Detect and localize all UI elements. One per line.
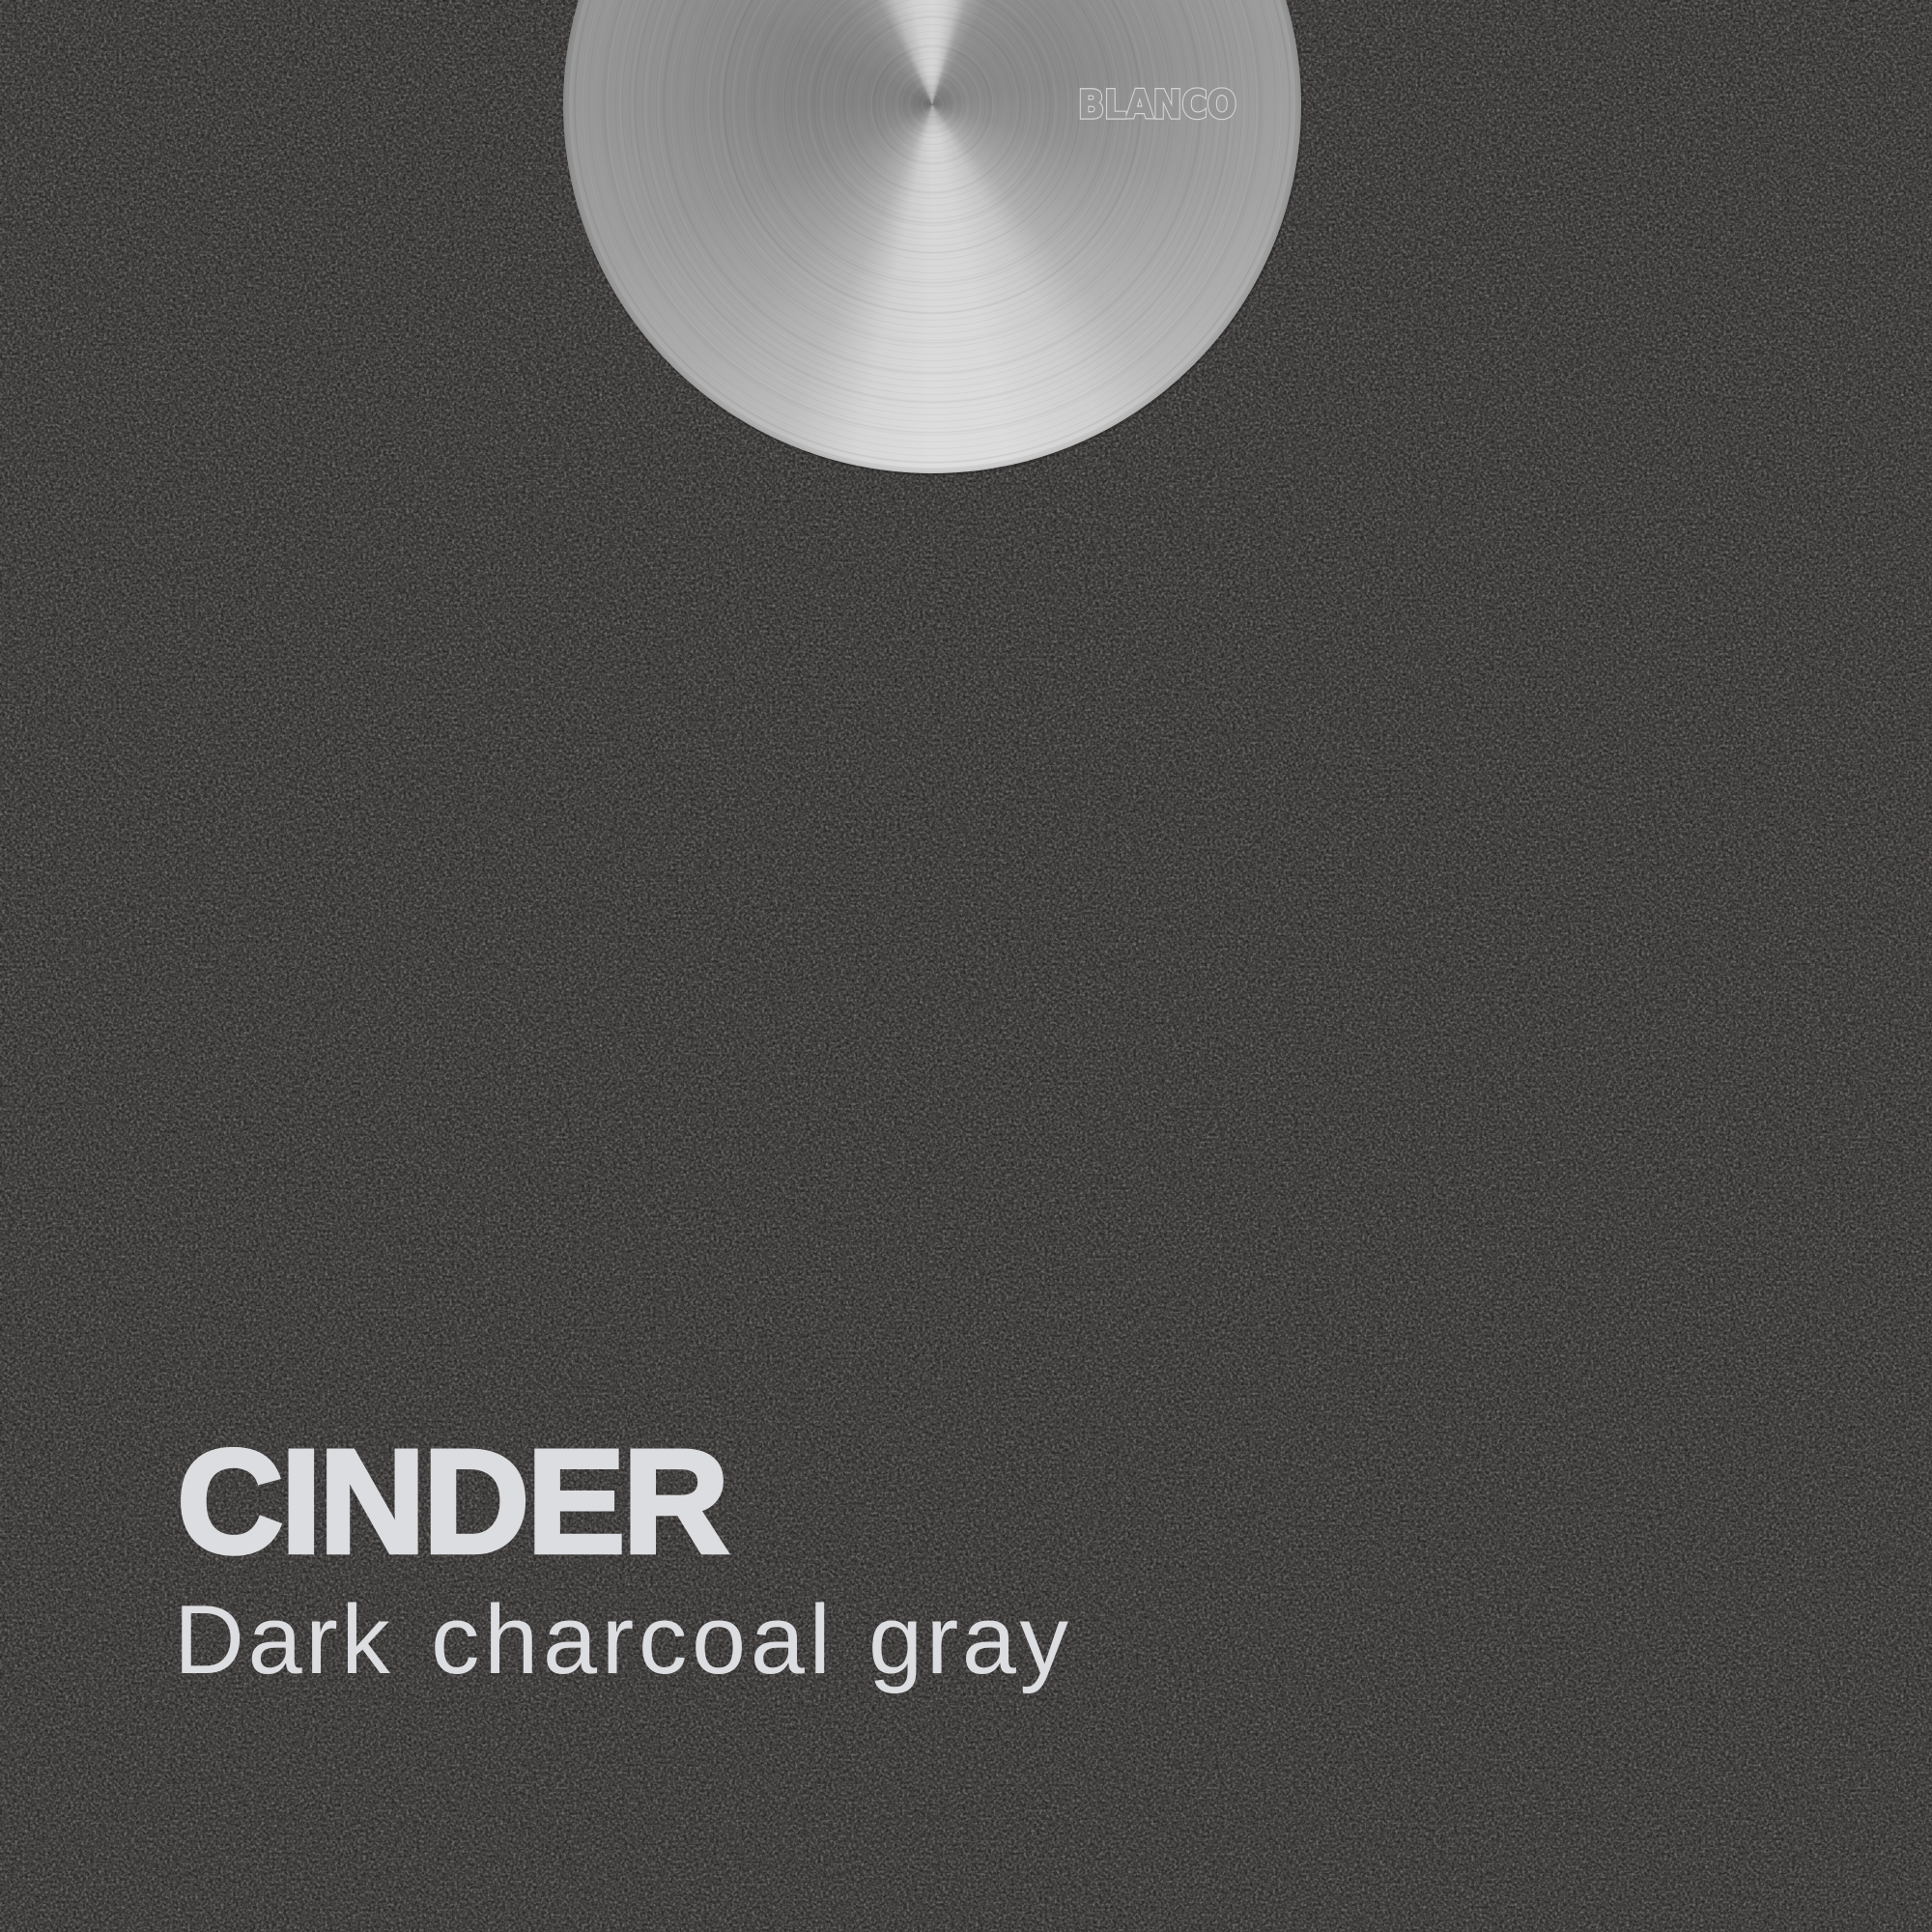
heading: CINDER: CINDER: [177, 1419, 729, 1584]
subheading: Dark charcoal gray: Dark: [174, 1586, 393, 1694]
subheading: Dark charcoal gray: gray: [868, 1586, 1071, 1694]
embossed BLANCO logo: BLANCO: [1078, 83, 1236, 128]
brushed steel drain cap: [563, 0, 1301, 473]
embossed BLANCO logo: BLANCO: [1078, 83, 1236, 128]
subheading: Dark charcoal gray: charcoal: [431, 1586, 836, 1694]
